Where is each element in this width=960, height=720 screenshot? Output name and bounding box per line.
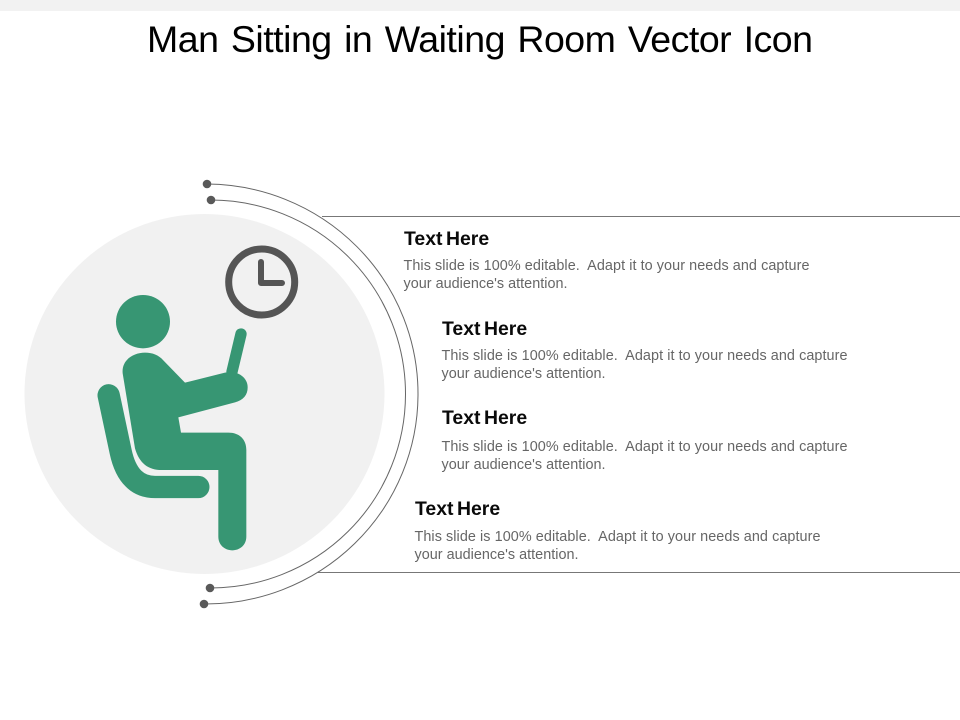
text block 2 [442,318,848,382]
text block 4 [414,498,820,563]
body [123,353,248,550]
text block 3: This slide is 100% editable. Adapt it to your needs and capture [442,439,848,455]
text block 4: your audience's attention. [414,547,578,563]
head [116,295,170,348]
chair [109,395,198,487]
text block 1: Text Here [404,228,489,250]
concentric arcs with end dots [200,180,418,608]
text block 1 [404,228,810,292]
text block 3 [442,407,848,473]
text block 4: Text Here [415,498,500,520]
icon: clock [229,249,295,315]
panel: background circle [24,214,384,574]
text block 1: your audience's attention. [404,276,568,292]
bottom divider line [318,572,960,574]
text block 2: This slide is 100% editable. Adapt it to your needs and capture [442,348,848,364]
text block 2: your audience's attention. [442,366,606,382]
text block 3: your audience's attention. [442,457,606,473]
text block 4: This slide is 100% editable. Adapt it to your needs and capture [414,529,820,545]
text block 1: This slide is 100% editable. Adapt it to your needs and capture [404,258,810,274]
title: Man Sitting in Waiting Room Vector Icon [147,18,813,60]
laptop screen [232,334,241,372]
text block 3: Text Here [442,407,527,429]
icon: man sitting on chair [109,295,248,550]
text block 2: Text Here [442,318,527,340]
top divider line [322,216,960,218]
